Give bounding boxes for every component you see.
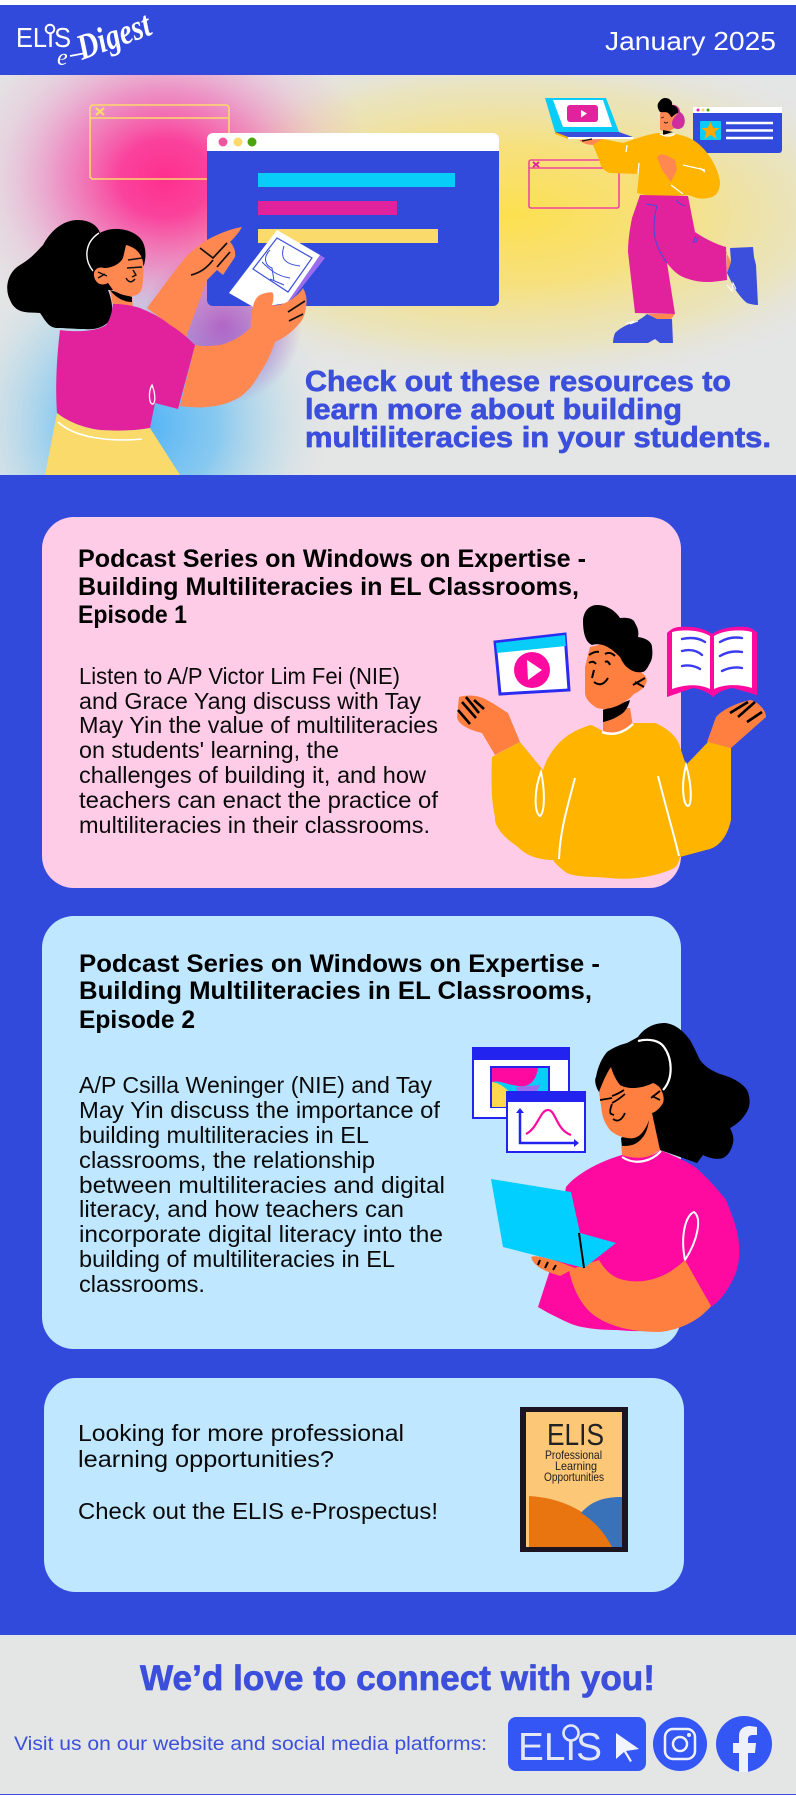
header bar: [0, 4, 796, 76]
logo: ELIS e-Digest: ELIS: [16, 22, 71, 53]
icon: facebook: [716, 1716, 772, 1772]
text: episode 1 description: challenges of building it, and how: [79, 762, 426, 788]
text: episode 2 description: building multiliteracies in EL: [79, 1122, 369, 1148]
sweater: [593, 133, 720, 199]
top: [56, 304, 195, 431]
face: [94, 245, 143, 296]
tablet: [287, 255, 325, 303]
text: episode 2 description: between multiliteracies and digital: [79, 1172, 445, 1198]
text: e-Prospectus prompt: Looking for more professional: [78, 1420, 404, 1446]
raised hand: [579, 139, 603, 145]
icon: ELIS website button: ELIS: [518, 1726, 602, 1769]
woman with tablet: [7, 220, 325, 475]
heading: episode 1: Episode 1: [78, 601, 187, 629]
hero headline: multiliteracies in your students.: [305, 422, 771, 454]
panel: podcast episode 2: [42, 916, 750, 1349]
text: episode 1 description: [79, 663, 439, 838]
book cover thumbnail: Professional: [545, 1448, 602, 1462]
heading: episode 1: Building Multiliteracies in EL Classrooms,: [78, 573, 579, 601]
hands: [457, 696, 520, 755]
laptop: [545, 98, 619, 132]
text: episode 1 description: on students' learning, the: [79, 737, 339, 763]
outline window: pink: [529, 160, 619, 208]
book cover thumbnail: [520, 1407, 628, 1552]
logo: ELIS e-Digest: e: [57, 45, 68, 71]
hero headline: [305, 366, 771, 454]
shoes: [613, 314, 673, 343]
text: episode 2 description: A/P Csilla Weninger (NIE) and Tay: [79, 1072, 432, 1098]
footer heading: We’d love to connect with you!: [140, 1659, 655, 1698]
heading: episode 2: [79, 950, 600, 1034]
outline window: yellow: [90, 105, 229, 179]
pointing arm: [147, 227, 242, 337]
footer text: Visit us on our website and social media platforms:: [14, 1734, 487, 1755]
open book icon: [667, 627, 757, 697]
video window icon: [495, 634, 569, 694]
heading: episode 1: Podcast Series on Windows on Expertise -: [78, 545, 586, 573]
arm: [569, 1260, 711, 1332]
face: [599, 1067, 664, 1138]
text: e-Prospectus prompt: Check out the ELIS e-Prospectus!: [78, 1498, 438, 1524]
text: e-Prospectus prompt: [78, 1420, 438, 1524]
text: episode 2 description: building of multiliteracies in EL: [79, 1246, 395, 1272]
illustration: woman with laptop: [473, 1023, 750, 1332]
side window with star: [693, 107, 782, 153]
hero headline: Check out these resources to: [305, 366, 731, 398]
hero headline: learn more about building: [305, 394, 682, 426]
text: episode 2 description: incorporate digital literacy into the: [79, 1221, 443, 1247]
heading: episode 2: Podcast Series on Windows on Expertise -: [79, 950, 600, 978]
text: episode 2 description: May Yin discuss the importance of: [79, 1097, 441, 1123]
heading: episode 2: Building Multiliteracies in EL Classrooms,: [79, 977, 592, 1005]
text: episode 2 description: [79, 1072, 445, 1297]
icon: ELIS website button: [508, 1717, 646, 1771]
text: episode 1 description: teachers can enact the practice of: [79, 787, 439, 813]
forearm and hand: [180, 288, 307, 407]
footer: [0, 1635, 796, 1795]
neck: [110, 290, 133, 308]
text: episode 2 description: classrooms.: [79, 1271, 205, 1297]
laptop: [531, 1256, 575, 1276]
text: episode 2 description: classrooms, the relationship: [79, 1147, 375, 1173]
skirt: [45, 413, 180, 475]
main blue background: [0, 475, 796, 1635]
hair: [595, 1023, 750, 1163]
sweater: [491, 723, 731, 879]
icon: instagram: [653, 1717, 707, 1771]
hair: [583, 605, 652, 672]
text: episode 1 description: May Yin the value of multiliteracies: [79, 712, 438, 738]
face: [585, 640, 647, 709]
logo: ELIS e-Digest: [16, 4, 157, 71]
ankles: [648, 252, 731, 319]
chart windows: [473, 1048, 585, 1152]
heading: episode 1: [78, 545, 586, 629]
pants: [628, 195, 727, 314]
head: [660, 112, 678, 132]
top: [538, 1150, 739, 1331]
text: episode 2 description: literacy, and how teachers can: [79, 1196, 404, 1222]
text: episode 1 description: multiliteracies in their classrooms.: [79, 812, 430, 838]
main browser window: [207, 133, 499, 306]
book cover thumbnail: Learning: [555, 1459, 597, 1473]
illustration: man with video and book: [457, 605, 766, 879]
book cover thumbnail: ELIS: [547, 1417, 604, 1452]
neck: [603, 708, 633, 733]
text: episode 1 description: and Grace Yang discuss with Tay: [79, 688, 421, 714]
book cover thumbnail: Opportunities: [544, 1470, 604, 1484]
man with laptop: [545, 98, 758, 343]
text: e-Prospectus prompt: learning opportunities?: [78, 1446, 334, 1472]
headband: [87, 233, 99, 271]
date: January 2025: [605, 26, 776, 56]
text: episode 1 description: Listen to A/P Victor Lim Fei (NIE): [79, 663, 400, 689]
heading: episode 2: Episode 2: [79, 1006, 195, 1034]
hero illustration panel: [0, 75, 796, 475]
hair: [7, 220, 145, 329]
neck: [621, 1113, 660, 1163]
panel: podcast episode 1: [42, 517, 766, 888]
panel: e-Prospectus: [44, 1378, 684, 1592]
